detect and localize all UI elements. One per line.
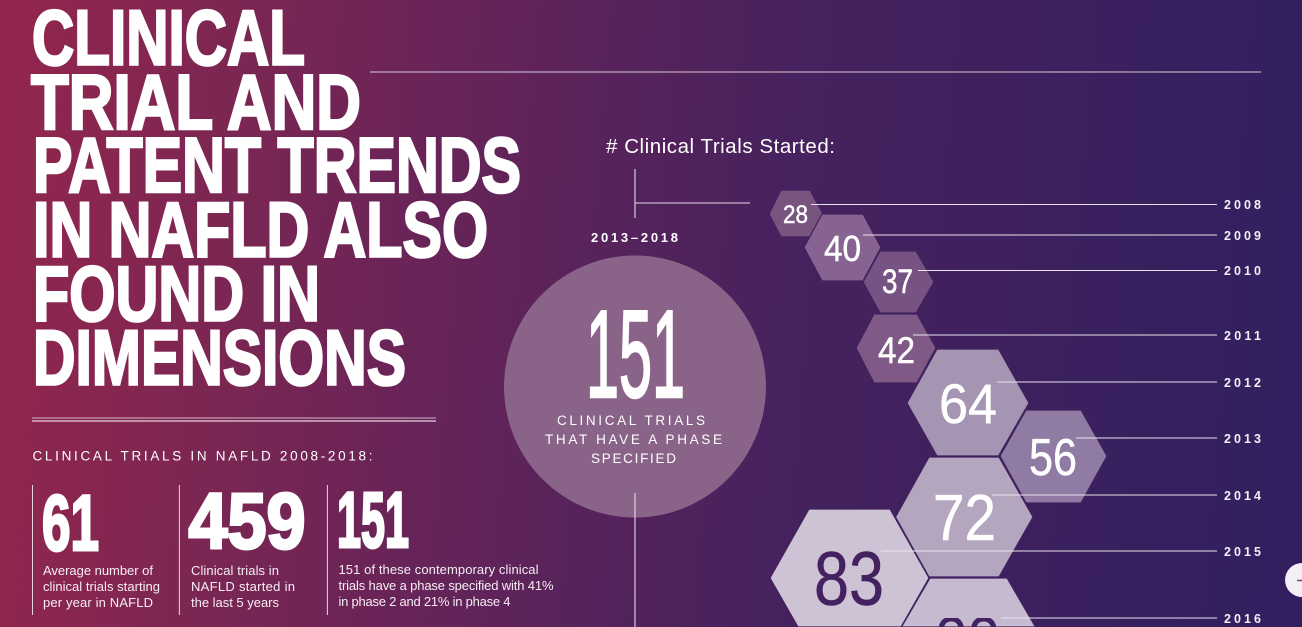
hex 2012 bbox=[907, 349, 1029, 456]
stat number 61: 61 bbox=[42, 478, 99, 567]
stat number 459: 459 bbox=[188, 476, 306, 565]
year labels: 2009 bbox=[1224, 229, 1261, 243]
stat caption 151: 151 of these contemporary clinical bbox=[338, 562, 539, 577]
stat caption 61: per year in NAFLD bbox=[43, 595, 153, 610]
hexagon chart bbox=[769, 190, 1107, 627]
hex 2010 bbox=[863, 251, 934, 313]
bracket connector bbox=[635, 169, 750, 218]
panel: stat 151 bbox=[327, 475, 554, 615]
hex 2012: 64 bbox=[939, 372, 997, 435]
hex 2015: 83 bbox=[814, 537, 884, 622]
title: IN NAFLD ALSO bbox=[33, 186, 488, 274]
stat caption 459: Clinical trials in bbox=[191, 563, 279, 578]
section heading: clinical trials 2008-2018: CLINICAL TRIALS IN NAFLD 2008-2018: bbox=[32, 448, 373, 464]
icon: edge button bbox=[1285, 563, 1302, 597]
year labels: 2015 bbox=[1224, 545, 1261, 559]
year labels: 2010 bbox=[1224, 264, 1261, 278]
stat number 151: 151 bbox=[337, 475, 409, 564]
circle: 151 trials with phase bbox=[504, 256, 766, 518]
range label: 2013–2018 bbox=[591, 230, 678, 245]
circle caption: CLINICAL TRIALS bbox=[557, 413, 705, 428]
title: DIMENSIONS bbox=[33, 314, 406, 402]
circle caption: THAT HAVE A PHASE bbox=[545, 432, 722, 447]
stat caption 151: in phase 2 and 21% in phase 4 bbox=[338, 594, 510, 609]
title bbox=[31, 0, 521, 402]
year leader lines bbox=[811, 204, 1217, 618]
hex 2013: 56 bbox=[1029, 429, 1077, 487]
year labels: 2008 bbox=[1224, 198, 1261, 212]
hex 2011 bbox=[856, 314, 936, 383]
stat caption 459: the last 5 years bbox=[191, 595, 280, 610]
circle caption bbox=[545, 413, 722, 466]
stat caption 61: Average number of bbox=[43, 563, 153, 578]
chart heading: # Clinical Trials Started: bbox=[606, 135, 835, 158]
stat caption 459: NAFLD started in bbox=[191, 579, 295, 594]
hex 2010: 37 bbox=[882, 263, 913, 301]
stat caption 61: clinical trials starting bbox=[43, 579, 160, 594]
hex 2014: 72 bbox=[933, 481, 996, 554]
title: PATENT TRENDS bbox=[33, 121, 521, 209]
stat caption 151 bbox=[338, 562, 554, 609]
stat caption 459 bbox=[191, 563, 295, 610]
hex 2008: 28 bbox=[783, 201, 808, 229]
year labels: 2011 bbox=[1224, 329, 1261, 343]
hex 2013 bbox=[1000, 410, 1107, 503]
hex 2014 bbox=[896, 457, 1033, 577]
year labels: 2016 bbox=[1224, 612, 1261, 626]
hex 2016 bbox=[902, 578, 1036, 627]
panel: stat 61 bbox=[32, 478, 160, 615]
year labels: 2013 bbox=[1224, 432, 1261, 446]
circle: 151 trials with phase: 151 bbox=[586, 286, 685, 424]
hex 2009 bbox=[804, 214, 881, 281]
year labels: 2012 bbox=[1224, 376, 1261, 390]
stat caption 61 bbox=[43, 563, 160, 610]
circle caption: SPECIFIED bbox=[591, 451, 676, 466]
hex 2008 bbox=[769, 190, 823, 237]
title: FOUND IN bbox=[33, 250, 320, 338]
hex 2011: 42 bbox=[878, 330, 915, 371]
year labels: 2014 bbox=[1224, 489, 1261, 503]
hex 2009: 40 bbox=[824, 228, 861, 269]
title: TRIAL AND bbox=[31, 58, 361, 146]
panel: stat 459 bbox=[179, 476, 306, 615]
year labels bbox=[1224, 198, 1261, 626]
stat caption 151: trials have a phase specified with 41% bbox=[338, 578, 554, 593]
hex 2015 bbox=[770, 509, 929, 627]
